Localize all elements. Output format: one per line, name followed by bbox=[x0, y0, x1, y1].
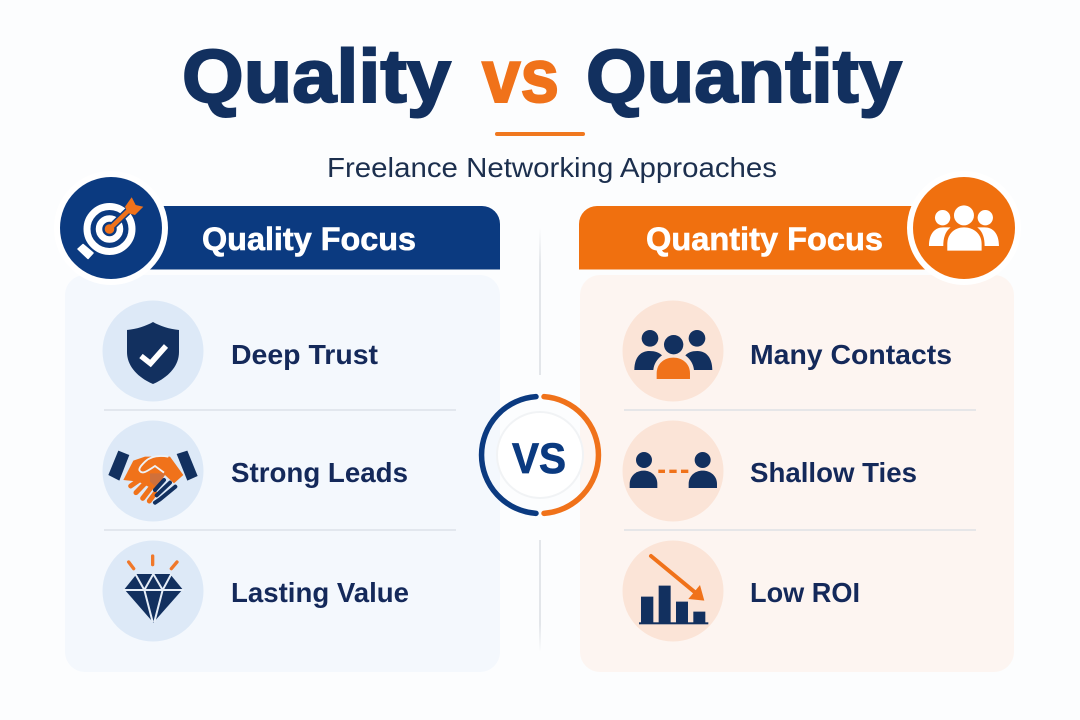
vs badge bbox=[482, 397, 598, 513]
title: Quantity bbox=[586, 34, 902, 118]
row: shallow ties: Shallow Ties bbox=[750, 457, 917, 488]
row: low roi bbox=[622, 540, 860, 642]
row: shallow ties bbox=[622, 420, 917, 522]
row: low roi: Low ROI bbox=[750, 577, 860, 608]
center divider bbox=[539, 228, 541, 652]
heading: quality focus: Quality Focus bbox=[202, 221, 416, 257]
row: strong leads bbox=[102, 420, 408, 522]
row: many contacts: Many Contacts bbox=[750, 339, 952, 370]
icon: target badge bbox=[54, 171, 168, 285]
header bar: quantity bbox=[579, 206, 940, 270]
vs badge: VS bbox=[512, 435, 566, 483]
title underline bbox=[495, 132, 585, 136]
row: many contacts bbox=[622, 300, 952, 402]
panel: quality focus bbox=[54, 171, 500, 672]
subtitle: Freelance Networking Approaches bbox=[327, 152, 777, 183]
panel: quantity focus bbox=[579, 171, 1021, 672]
title: Quality bbox=[182, 34, 451, 118]
row: lasting value bbox=[102, 540, 409, 642]
title: vs bbox=[482, 34, 559, 118]
title bbox=[182, 34, 902, 118]
row: strong leads: Strong Leads bbox=[231, 457, 408, 488]
row: lasting value: Lasting Value bbox=[231, 577, 409, 608]
row: deep trust bbox=[102, 300, 378, 402]
header bar: quality bbox=[150, 206, 500, 270]
icon: people badge bbox=[907, 171, 1021, 285]
row: deep trust: Deep Trust bbox=[231, 339, 378, 370]
heading: quantity focus: Quantity Focus bbox=[646, 221, 883, 257]
